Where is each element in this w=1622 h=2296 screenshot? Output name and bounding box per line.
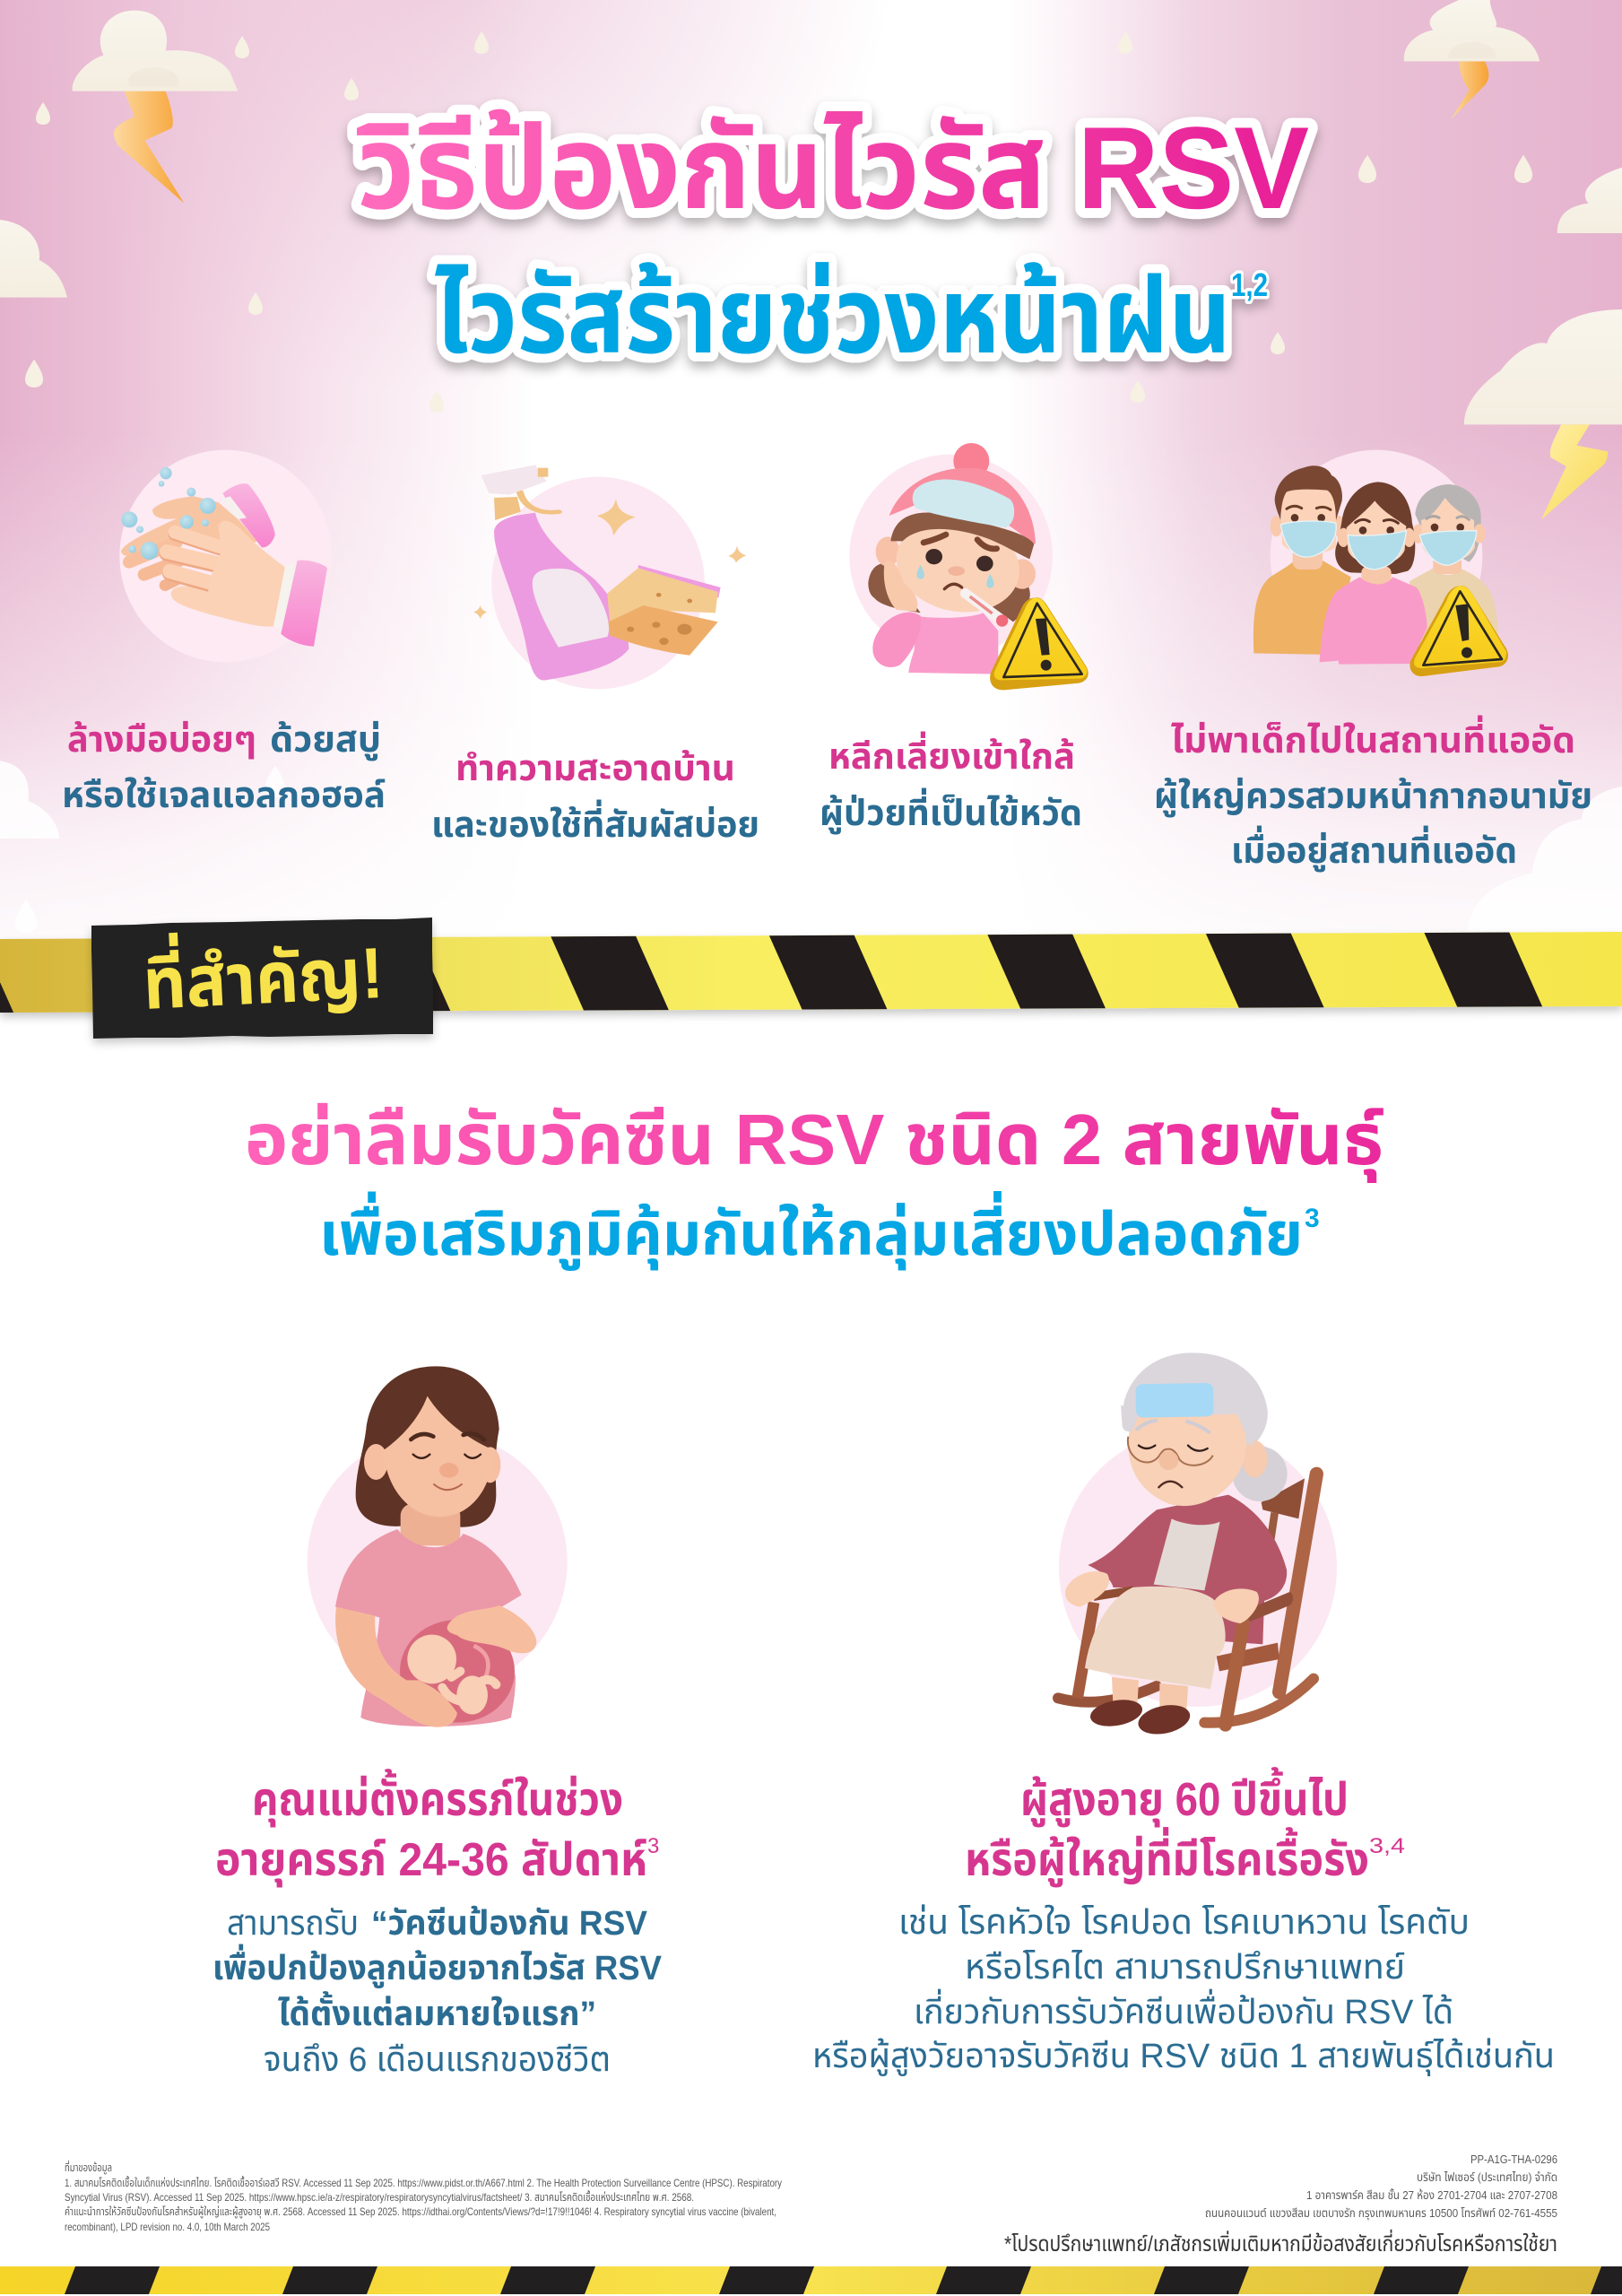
references xyxy=(65,2160,782,2233)
illustration: pregnant mother xyxy=(308,1366,568,1727)
sticker: important xyxy=(91,918,433,1039)
heading: vaccine reminder: อย่าลืมรับวัคซีน RSV ชนิด 2 สายพันธุ์ xyxy=(245,1100,1383,1183)
left column body: เพื่อปกป้องลูกน้อยจากไวรัส RSV xyxy=(213,1944,663,1988)
cloud, left edge xyxy=(0,220,67,298)
tip 1: wash hands: ล้างมือบ่อยๆ xyxy=(67,719,256,760)
tip 4: avoid crowded places xyxy=(1154,715,1592,873)
subheading: protect risk groups: เพื่อเสริมภูมิคุ้มกันให้กลุ่มเสี่ยงปลอดภัย xyxy=(319,1191,1303,1271)
tip 3: avoid sick people: ผู้ป่วยที่เป็นไข้หวัด xyxy=(820,787,1082,835)
background gradient xyxy=(0,0,1622,1058)
faint cloud, lower right xyxy=(1468,787,1622,937)
left column body: สามารถรับ xyxy=(227,1905,359,1943)
icon: cleaning spray and sponge xyxy=(473,465,746,689)
references: 1. สมาคมโรคติดเชื้อในเด็กแห่งประเทศไทย. โรคติดเชื้ออาร์เอสวี RSV. Accessed 11 Sep 2025. https://www.pidst.or.th/A667.html 2. The Health Protection Surveillance Centre (HPSC). Respiratory xyxy=(65,2175,782,2189)
tip 3: avoid sick people xyxy=(820,731,1082,835)
right column body xyxy=(812,1904,1555,2076)
yellow lightning, right xyxy=(1541,424,1608,519)
right column body: เกี่ยวกับการรับวัคซีนเพื่อป้องกัน RSV ได้ xyxy=(914,1988,1453,2031)
left column body: ได้ตั้งแต่ลมหายใจแรก” xyxy=(278,1990,596,2033)
tip 1: wash hands: หรือใช้เจลแอลกอฮอล์ xyxy=(62,775,386,815)
subtitle: ไวรัสร้ายช่วงหน้าฝน xyxy=(435,257,1231,376)
right column heading: หรือผู้ใหญ่ที่มีโรคเรื้อรัง xyxy=(965,1827,1369,1888)
tip 4: avoid crowded places: เมื่ออยู่สถานที่แออัด xyxy=(1231,825,1517,873)
icon: washing hands xyxy=(119,450,332,662)
tip 4: avoid crowded places: ผู้ใหญ่ควรสวมหน้ากากอนามัย xyxy=(1154,776,1592,818)
left column heading: 3 xyxy=(647,1834,659,1858)
faint cloud, lower left xyxy=(0,761,59,839)
tip 3: avoid sick people: หลีกเลี่ยงเข้าใกล้ xyxy=(828,731,1075,777)
left column body: จนถึง 6 เดือนแรกของชีวิต xyxy=(264,2041,611,2079)
right column body: หรือผู้สูงวัยอาจรับวัคซีน RSV ชนิด 1 สายพันธุ์ได้เช่นกัน xyxy=(812,2038,1555,2076)
subheading: protect risk groups: 3 xyxy=(1305,1204,1320,1233)
references: ที่มาของข้อมูล xyxy=(65,2160,112,2174)
left column heading: อายุครรภ์ 24-36 สัปดาห์ xyxy=(215,1834,647,1887)
decorative clouds and lightning xyxy=(0,0,1622,424)
company information: บริษัท ไฟเซอร์ (ประเทศไทย) จำกัด xyxy=(1417,2170,1557,2184)
tip 2: clean the house xyxy=(431,748,759,845)
cloud, right edge xyxy=(1557,168,1622,233)
company information: ถนนคอนแวนต์ แขวงสีลม เขตบางรัก กรุงเทพมหานคร 10500 โทรศัพท์ 02-761-4555 xyxy=(1205,2206,1557,2220)
company information: 1 อาคารพาร์ค สีลม ชั้น 27 ห้อง 2701-2704 และ 2707-2708 xyxy=(1306,2187,1557,2202)
title: วิธีป้องกันไวรัส RSV xyxy=(357,102,1309,233)
icon: masked family with warning sign xyxy=(1253,450,1508,676)
illustration: elderly woman in rocking chair xyxy=(1058,1352,1337,1738)
tip 2: clean the house: ทำความสะอาดบ้าน xyxy=(455,748,735,788)
references: คำแนะนำการให้วัคซีนป้องกันโรคสำหรับผู้ใหญ่และผู้สูงอายุ พ.ศ. 2568. Accessed 11 Sep 2025. https://idthai.org/Contents/Views/?d=!17!9!!1046! 4. Respiratory syncytial virus vaccine (bivalent, xyxy=(65,2205,776,2218)
left column body: “วัคซีนป้องกัน RSV xyxy=(371,1905,648,1943)
large cloud, right xyxy=(1464,309,1622,424)
icon: sick child with warning sign xyxy=(849,443,1089,690)
tip 4: avoid crowded places: ไม่พาเด็กไปในสถานที่แออัด xyxy=(1171,715,1575,761)
sticker: important: ที่สำคัญ! xyxy=(141,923,386,1024)
disclaimer: *โปรดปรึกษาแพทย์/เภสัชกรเพิ่มเติมหากมีข้อสงสัยเกี่ยวกับโรคหรือการใช้ยา xyxy=(1004,2229,1557,2257)
tip 1: wash hands: ด้วยสบู่ xyxy=(270,719,381,761)
right column heading: 3,4 xyxy=(1369,1834,1405,1858)
subtitle: 1,2 xyxy=(1231,266,1268,303)
left column body xyxy=(213,1905,663,2079)
company information: PP-A1G-THA-0296 xyxy=(1470,2152,1557,2166)
raindrops xyxy=(15,31,1532,933)
right column body: เช่น โรคหัวใจ โรคปอด โรคเบาหวาน โรคตับ xyxy=(898,1904,1470,1942)
references: recombinant), LPD revision no. 4.0, 10th March 2025 xyxy=(65,2221,270,2233)
left column heading xyxy=(215,1769,659,1887)
left column heading: คุณแม่ตั้งครรภ์ในช่วง xyxy=(252,1769,623,1827)
tip 1: wash hands xyxy=(62,719,386,815)
cloud with orange lightning, top left xyxy=(73,11,238,204)
references: Syncytial Virus (RSV). Accessed 11 Sep 2025. https://www.hpsc.ie/a-z/respiratory/respiratorysyncytialvirus/factsheet/ 3. สมาคมโรคติดเชื้อแห่งประเทศไทย พ.ศ. 2568. xyxy=(65,2189,694,2204)
cloud with orange lightning, top right xyxy=(1404,0,1540,119)
right column heading: ผู้สูงอายุ 60 ปีขึ้นไป xyxy=(1020,1767,1349,1828)
caution tape, upper xyxy=(0,924,1622,1022)
right column body: หรือโรคไต สามารถปรึกษาแพทย์ xyxy=(965,1949,1405,1987)
tip 2: clean the house: และของใช้ที่สัมผัสบ่อย xyxy=(431,799,759,845)
caution tape, bottom xyxy=(0,2266,1622,2294)
company information xyxy=(1205,2152,1557,2220)
right column heading xyxy=(965,1767,1405,1888)
